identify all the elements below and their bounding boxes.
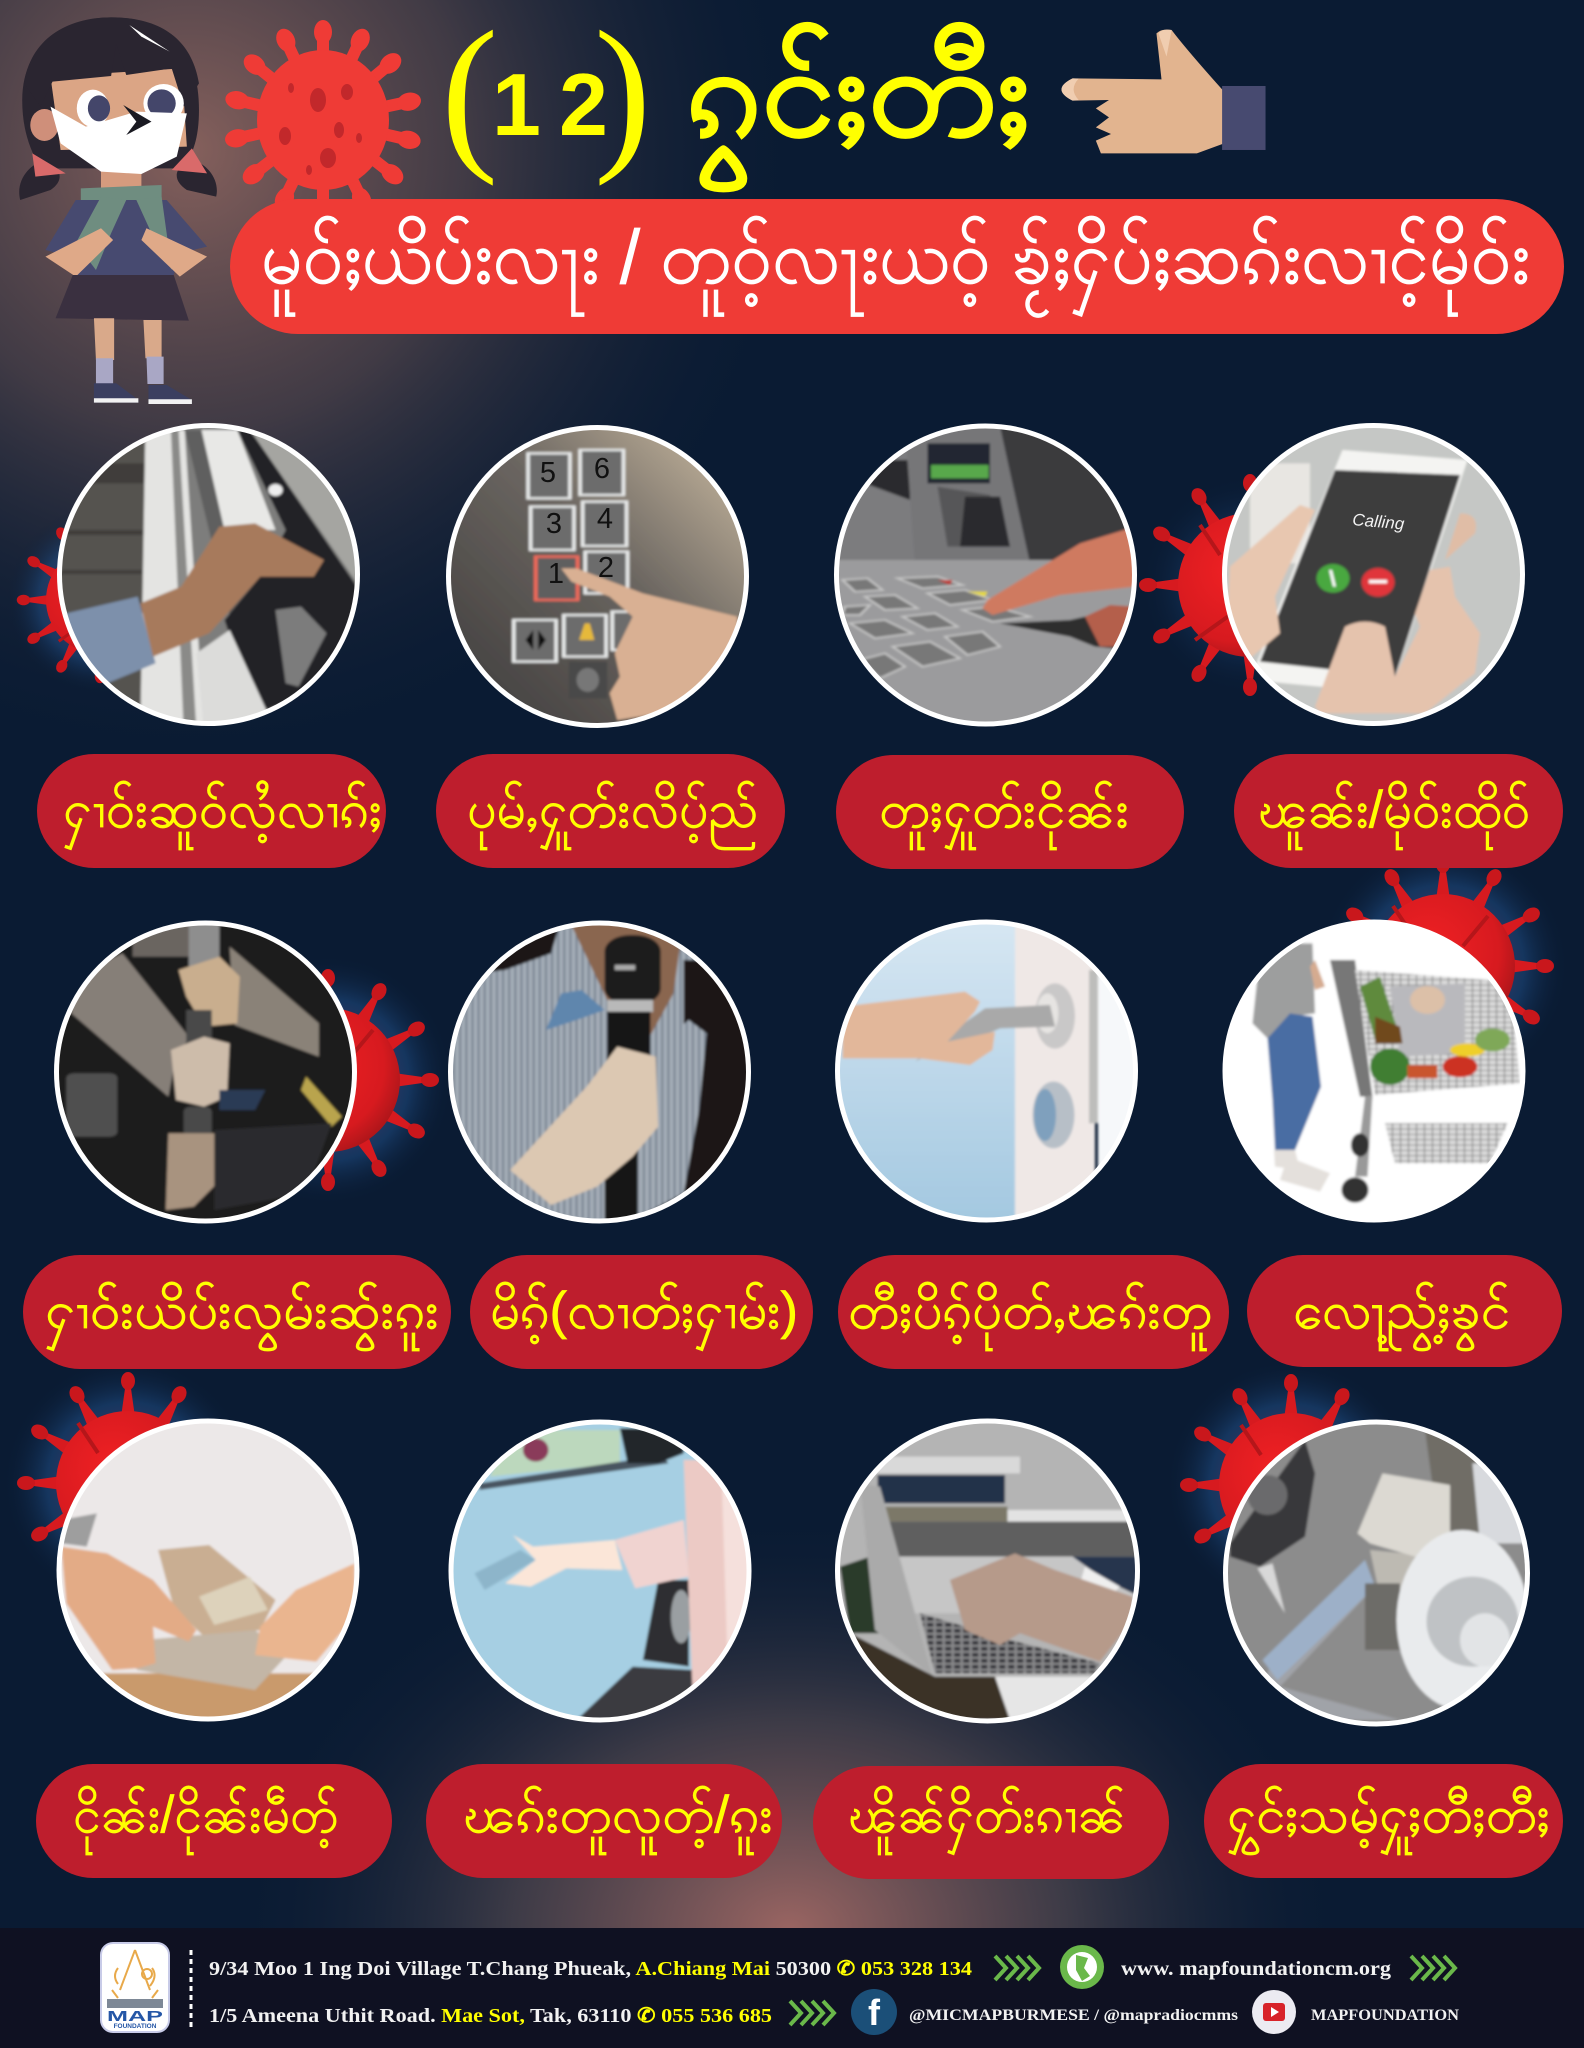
chevrons <box>995 1956 1039 1980</box>
title: 12 places: ( <box>441 0 498 187</box>
photo: ATM keypad <box>830 420 1140 730</box>
address: Chiang Mai: 9/34 Moo 1 Ing Doi Village T.Chang Phueak, A.Chiang Mai 50300 ✆ 053 328 134 <box>209 1958 972 1980</box>
MAP Foundation logo: MAP <box>107 2008 163 2025</box>
icon: youtube <box>1252 1990 1296 2034</box>
photo: elevator buttons: 4 <box>597 503 613 535</box>
icon: facebook <box>851 1989 897 2035</box>
label: toilet: ႁွင်ႈသမ့်ႁူႈတီႈတီႈ <box>1227 1786 1550 1855</box>
photo: elevator buttons: 6 <box>594 453 610 485</box>
header banner: wash hands <box>230 199 1564 334</box>
label: escalator handrail: ႁၢဝ်းဆူဝ်လႆ့လၢၵ်ႈ <box>63 781 382 850</box>
label: bus handrail <box>23 1255 451 1369</box>
virus: behind cart <box>1318 841 1568 1091</box>
youtube name: MAPFOUNDATION <box>1311 2007 1459 2024</box>
label: shopping cart <box>1247 1255 1562 1367</box>
title: 12 places: ၵွင်ႈတီႈ <box>687 20 1030 193</box>
label: toilet <box>1204 1764 1563 1878</box>
photo: toilet and bin <box>1220 1417 1535 1727</box>
virus: behind money <box>3 1358 253 1608</box>
address: Mae Sot: 1/5 Ameena Uthit Road. Mae Sot, Tak, 63110 ✆ 055 536 685 <box>209 2005 772 2027</box>
photo: elevator buttons: 1 <box>548 558 564 590</box>
photo: phone calling <box>1220 420 1530 730</box>
label: shopping cart: လေႃ့ညွ့်ႈၶွင် <box>1293 1282 1510 1351</box>
photo: door handle <box>830 917 1143 1223</box>
label: door handle: တီႈပိၵ့်ပိုတ်ႇၽၵ်းတူ <box>848 1282 1212 1351</box>
label: microphone <box>470 1255 813 1369</box>
girl character with face mask <box>19 17 217 404</box>
label: door handle <box>838 1255 1229 1369</box>
virus: left of handrail <box>6 506 194 694</box>
photo: car door handle <box>444 1417 760 1727</box>
icon: facebook: f <box>868 1992 881 2033</box>
photo: bus grab pole <box>51 920 362 1223</box>
photo: counting money <box>51 1417 367 1723</box>
photo: laptop typing <box>830 1417 1145 1727</box>
virus: header <box>223 20 423 220</box>
label: money <box>36 1764 392 1878</box>
photo: shopping cart <box>1220 915 1530 1225</box>
title: 12 places <box>441 0 1030 193</box>
label: lift button: ပုမ်ႇႁူတ်းလိပ့်ည် <box>467 781 758 850</box>
chevrons <box>790 2001 834 2025</box>
photo: elevator buttons <box>446 425 749 728</box>
MAP Foundation logo: FOUNDATION <box>114 2023 157 2030</box>
label: ATM: တူႈႁူတ်းငိုၼ်း <box>879 781 1129 850</box>
title: 12 places: ) <box>594 0 651 187</box>
label: escalator handrail <box>37 754 386 868</box>
label: phone: ၽူၼ်း/မိုဝ်းထိုဝ် <box>1258 781 1530 850</box>
label: computer: ၽိူၼ်ႁိတ်းၵၢၼ် <box>848 1786 1126 1855</box>
label: phone <box>1234 754 1563 868</box>
footer bar <box>0 1928 1584 2048</box>
photo: phone calling: Calling <box>1352 510 1406 534</box>
virus: behind toilet <box>1166 1360 1416 1610</box>
photo: microphone <box>444 920 755 1227</box>
MAP Foundation logo <box>101 1943 169 2032</box>
virus: between ATM and phone <box>1139 474 1361 696</box>
facebook handles: @MICMAPBURMESE / @mapradiocmms <box>909 2007 1238 2024</box>
virus: right of bus pole <box>203 955 453 1205</box>
label: car door: ၽၵ်းတူလူတ့်/ၵူး <box>463 1786 773 1855</box>
header banner: wash hands: မူဝ်ႈယိပ်းလႃး / တူဝ့်လႃးယဝ့် ၶႂ်ႈႁိပ်ႈဆၵ်းလၢင့်မိုဝ်း <box>261 215 1530 318</box>
label: ATM <box>836 755 1184 869</box>
label: lift button <box>436 754 785 868</box>
photo: elevator buttons: 2 <box>598 552 614 584</box>
chevrons <box>1411 1956 1455 1980</box>
label: microphone: မိၵ့်(လၢတ်ႈႁၢမ်း) <box>490 1282 798 1351</box>
icon: globe <box>1060 1945 1104 1989</box>
website: www. mapfoundationcm.org <box>1121 1958 1391 1980</box>
photo: elevator buttons: 5 <box>540 457 556 489</box>
label: car door <box>426 1764 782 1878</box>
label: money: ငိုၼ်း/ငိုၼ်းမဵတ့် <box>73 1786 338 1855</box>
icon: pointing hand <box>1062 30 1266 153</box>
label: bus handrail: ႁၢဝ်းယိပ်းလွမ်းဆွ်းၵူး <box>45 1282 439 1351</box>
photo: escalator handrail <box>51 420 367 730</box>
photo: elevator buttons: 3 <box>546 508 562 540</box>
label: computer <box>813 1766 1169 1879</box>
title: 12 places: 12 <box>492 55 608 154</box>
